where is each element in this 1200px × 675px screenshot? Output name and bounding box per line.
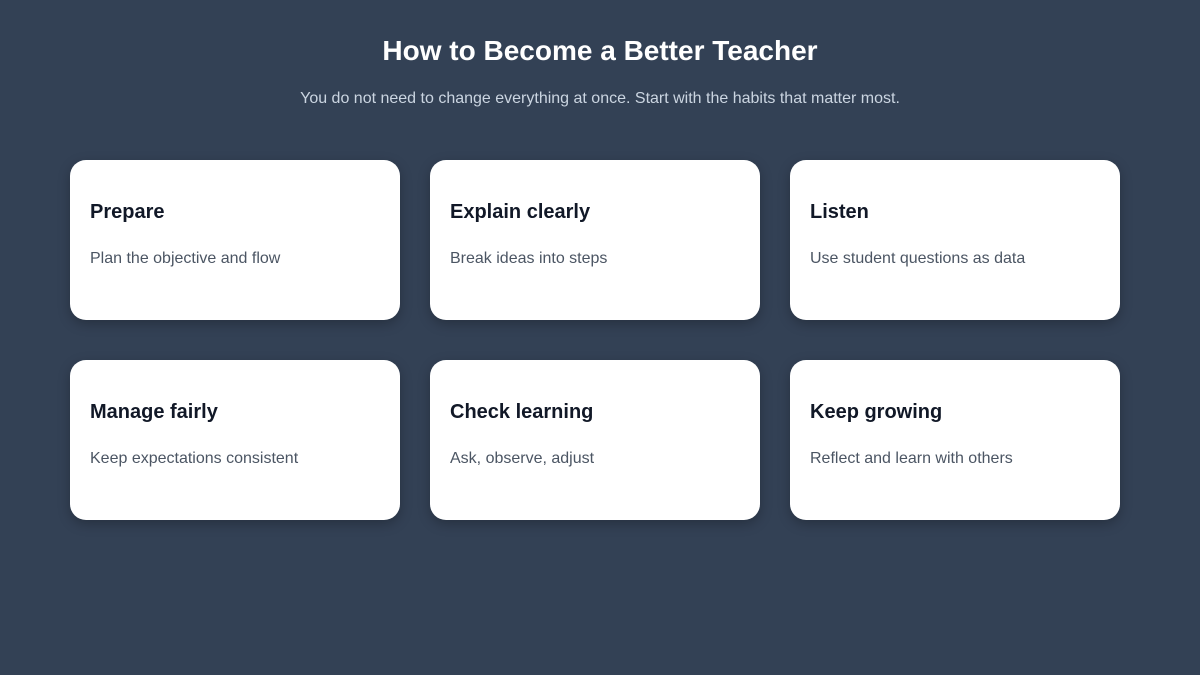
text: Explain clearly description: Break ideas into steps [450, 250, 607, 267]
heading: Explain clearly: Explain clearly [450, 201, 590, 223]
panel: Listen [790, 160, 1120, 320]
panel: Explain clearly [430, 160, 760, 320]
text: Manage fairly description: Keep expectations consistent [90, 450, 298, 467]
title: How to Become a Better Teacher [382, 35, 818, 66]
heading: Check learning: Check learning [450, 401, 593, 423]
subtitle: You do not need to change everything at once. Start with the habits that matter most. [300, 90, 900, 107]
text: Check learning description: Ask, observe, adjust [450, 450, 594, 467]
heading: Keep growing: Keep growing [810, 401, 942, 423]
heading: Manage fairly: Manage fairly [90, 401, 218, 423]
heading: Listen: Listen [810, 201, 869, 223]
text: Listen description: Use student questions as data [810, 250, 1025, 267]
text: Prepare description: Plan the objective and flow [90, 250, 280, 267]
heading: Prepare: Prepare [90, 201, 164, 223]
panel: Manage fairly [70, 360, 400, 520]
text: Keep growing description: Reflect and learn with others [810, 450, 1013, 467]
panel: Keep growing [790, 360, 1120, 520]
panel: Prepare [70, 160, 400, 320]
panel: Check learning [430, 360, 760, 520]
